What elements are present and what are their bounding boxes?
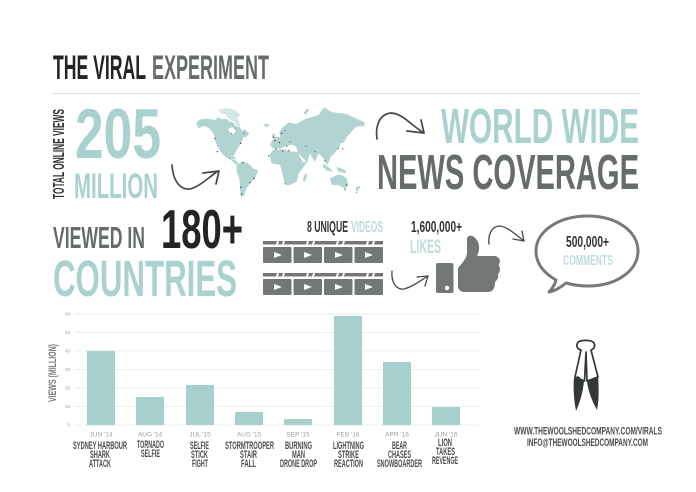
category labels: DRONE DROP — [280, 458, 317, 470]
y axis values — [65, 312, 70, 428]
category labels: SELFIE — [190, 440, 209, 452]
stat: 205: 205 — [75, 94, 161, 173]
icon: speech bubble — [536, 216, 638, 292]
label: likes: LIKES — [410, 237, 441, 258]
date labels — [90, 432, 458, 438]
category labels: SYDNEY HARBOUR — [73, 440, 127, 452]
category labels — [73, 437, 458, 470]
text: viewed in: VIEWED IN — [53, 221, 145, 255]
category labels: ATTACK — [89, 458, 111, 470]
category labels: STICK — [191, 449, 208, 461]
date labels: FEB '16 — [337, 432, 360, 438]
y axis values: 0 — [67, 422, 70, 428]
category labels: FIGHT — [192, 458, 208, 470]
category labels: TAKES — [436, 446, 455, 458]
category labels: STRIKE — [338, 449, 359, 461]
category labels: STAIR — [240, 449, 257, 461]
arrow: likes to comments — [489, 226, 524, 244]
category labels: FALL — [241, 458, 256, 470]
label: comments: COMMENTS — [563, 253, 613, 269]
arrow: million to map — [172, 165, 219, 189]
date labels: JUN '14 — [90, 432, 113, 438]
videos label: 8 UNIQUE — [307, 219, 348, 236]
stat: likes count: 1,600,000+ — [411, 219, 462, 236]
date labels: JUL '15 — [189, 432, 211, 438]
videos label: VIDEOS — [351, 219, 383, 236]
date labels: APR '16 — [385, 432, 409, 438]
category labels: LIGHTNING — [333, 440, 364, 452]
arrow: videos to likes — [392, 271, 428, 289]
arrow: map to world wide — [377, 113, 424, 139]
world map — [196, 107, 365, 197]
y axis values: 30 — [65, 367, 70, 372]
stat: comments count: 500,000+ — [566, 234, 609, 251]
date labels: AUG '15 — [237, 432, 262, 438]
title: THE VIRAL — [53, 49, 146, 87]
category labels: BEAR — [392, 440, 407, 452]
y axis values: 60 — [65, 312, 70, 316]
title: EXPERIMENT — [152, 49, 269, 87]
total online views label: TOTAL ONLINE VIEWS — [51, 109, 68, 199]
category labels: SNOWBOARDER — [377, 458, 422, 470]
y axis values: 20 — [65, 386, 70, 390]
heading: countries: COUNTRIES — [53, 250, 237, 307]
category labels: REACTION — [334, 458, 363, 470]
category labels: LION — [438, 437, 452, 449]
y axis values: 40 — [65, 348, 70, 354]
icon: video strip top — [263, 241, 383, 263]
bars — [87, 316, 460, 425]
y axis values: 10 — [65, 404, 70, 409]
category labels: SHARK — [90, 449, 110, 461]
category labels: SELFIE — [141, 448, 160, 460]
category labels: TORNADO — [137, 439, 164, 451]
category labels: MAN — [292, 449, 305, 461]
bar chart — [47, 312, 480, 470]
icon: thumbs up — [436, 236, 500, 293]
date labels: AUG '14 — [138, 432, 163, 438]
icon: video strip bottom — [263, 273, 383, 295]
category labels: REVENGE — [432, 455, 458, 467]
date labels: SEP '15 — [286, 432, 310, 438]
y axis values: 50 — [65, 330, 70, 335]
icon: wool shears — [574, 340, 599, 411]
category labels: STORMTROOPER — [225, 440, 274, 452]
category labels: CHASES — [388, 449, 411, 461]
stat: 180+: 180+ — [161, 198, 243, 260]
category labels: BURNING — [285, 440, 312, 452]
date labels: JUN '16 — [435, 432, 458, 438]
y axis title: VIEWS (MILLION) — [47, 344, 59, 402]
stat: million: MILLION — [74, 167, 158, 206]
